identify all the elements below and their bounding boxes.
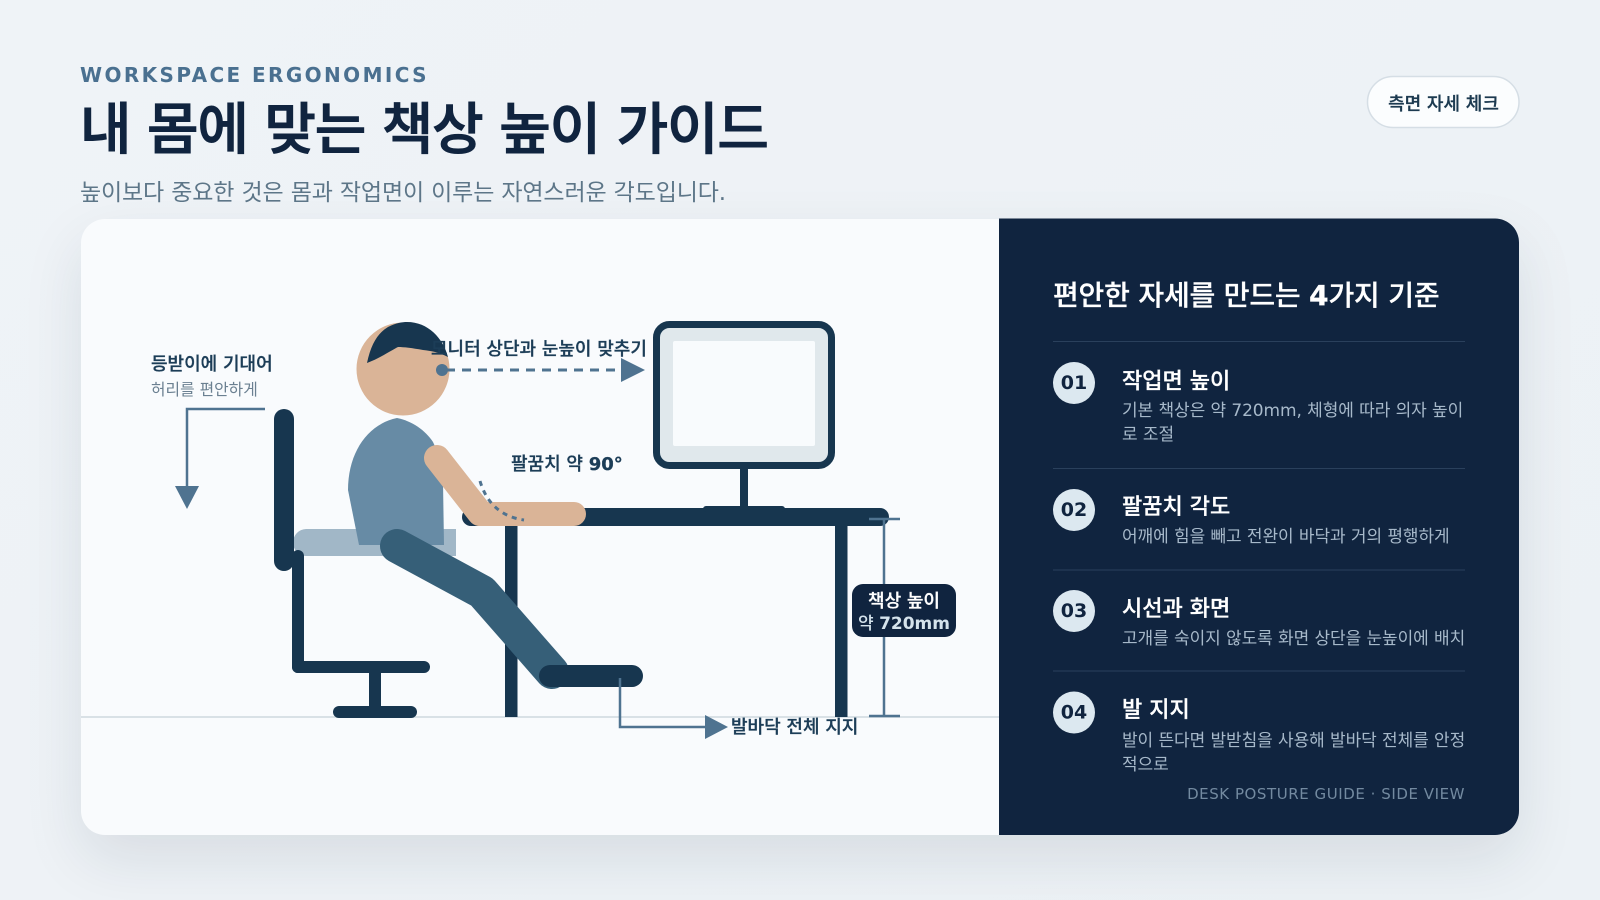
panel: criteria background	[999, 218, 1519, 835]
item 03: 시선과 화면	[1122, 597, 1230, 622]
title: 내 몸에 맞는 책상 높이 가이드	[80, 98, 768, 163]
arrow: eye line to monitor	[446, 358, 645, 382]
subtitle: 높이보다 중요한 것은 몸과 작업면이 이루는 자연스러운 각도입니다.	[80, 180, 726, 206]
panel: main card	[81, 218, 1519, 835]
callout: foot support: 발바닥 전체 지지	[731, 717, 858, 738]
item 04: 발이 뜬다면 발받침을 사용해 발바닥 전체를 안정	[1122, 731, 1465, 751]
item 03: 03	[1061, 600, 1087, 622]
item 03	[1053, 590, 1465, 649]
item 01: 작업면 높이	[1122, 370, 1230, 394]
item 02	[1053, 489, 1450, 547]
heading: four criteria: 편안한 자세를 만드는 4가지 기준	[1053, 279, 1439, 312]
badge: side posture check: 측면 자세 체크	[1388, 94, 1499, 115]
dimension: desk height: 책상 높이	[868, 591, 940, 612]
item 03: 고개를 숙이지 않도록 화면 상단을 눈높이에 배치	[1122, 629, 1465, 649]
item 01	[1053, 362, 1463, 445]
dimension: desk height	[852, 519, 956, 716]
illustration: monitor	[656, 324, 832, 512]
arrow: back rest	[175, 409, 265, 509]
illustration: chair	[274, 409, 456, 718]
arrow: foot support	[620, 678, 728, 739]
item 01: 01	[1061, 372, 1087, 394]
item 02: 02	[1061, 499, 1087, 521]
item 04: 04	[1061, 702, 1087, 724]
callout: back rest: 등받이에 기대어	[151, 354, 273, 375]
item 04: 발 지지	[1122, 698, 1190, 723]
illustration: person	[348, 322, 643, 687]
badge: side posture check	[1368, 76, 1519, 128]
callout: monitor top at eye level: 모니터 상단과 눈높이 맞추기	[431, 339, 647, 360]
callout: back rest: 허리를 편안하게	[151, 380, 258, 399]
eyebrow heading: WORKSPACE ERGONOMICS	[80, 63, 429, 87]
item 04: 적으로	[1122, 755, 1169, 775]
callout: back rest	[151, 354, 273, 399]
item 02: 팔꿈치 각도	[1122, 495, 1230, 520]
item 01: 기본 책상은 약 720mm, 체형에 따라 의자 높이	[1122, 401, 1463, 421]
floor line	[81, 716, 999, 718]
illustration: desk	[462, 508, 889, 717]
callout: elbow angle: 팔꿈치 약 90°	[511, 454, 623, 475]
item 04	[1053, 692, 1465, 775]
item 01: 로 조절	[1122, 425, 1174, 445]
dimension: desk height: 약 720mm	[858, 614, 950, 634]
footer caption: DESK POSTURE GUIDE · SIDE VIEW	[1187, 785, 1465, 803]
item 02: 어깨에 힘을 빼고 전완이 바닥과 거의 평행하게	[1122, 527, 1450, 547]
